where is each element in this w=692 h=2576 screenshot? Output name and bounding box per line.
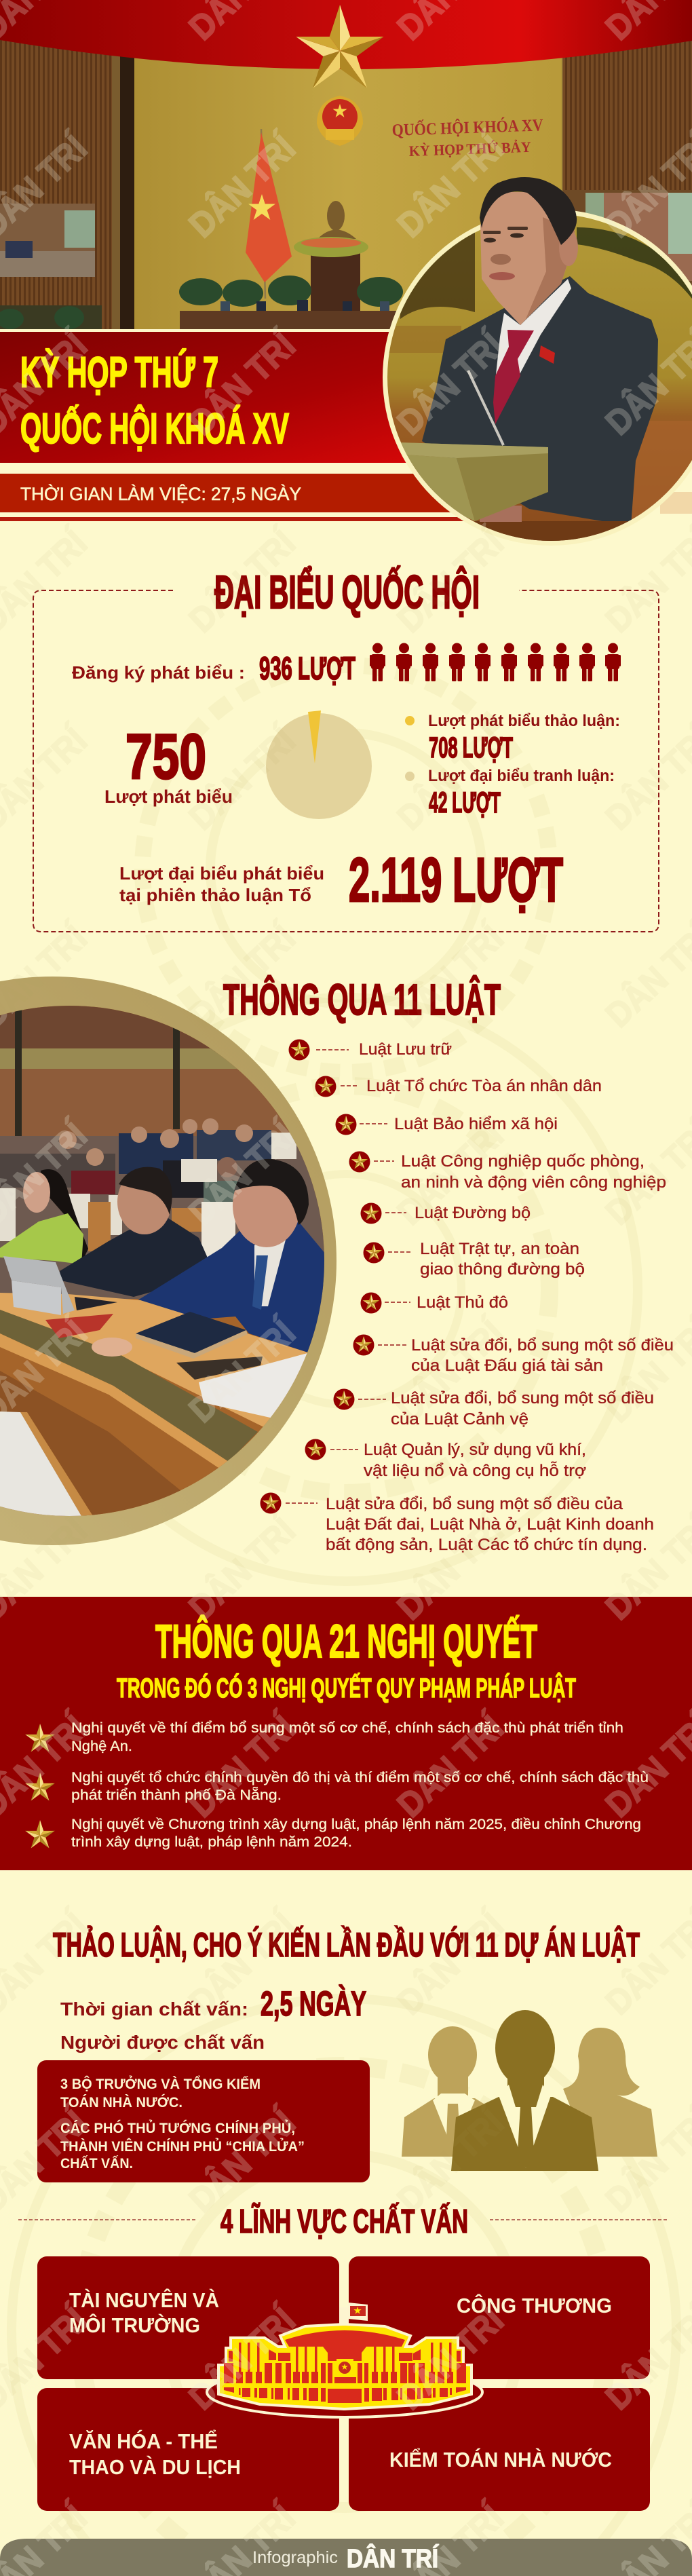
card: industry and trade	[349, 2256, 650, 2379]
man in navy suit	[138, 1221, 326, 1353]
nose and mouth	[491, 254, 511, 265]
law 5	[361, 1202, 531, 1224]
notebook	[136, 1312, 246, 1353]
resolution 3: trình xây dựng luật, pháp lệnh năm 2024.	[71, 1834, 352, 1850]
stat: 750 speeches: 750	[126, 721, 206, 792]
law 11	[261, 1493, 654, 1554]
resolution 2: Nghị quyết tổ chức chính quyền đô thị và thí điểm một số cơ chế, chính sách đặc thù	[71, 1770, 649, 1785]
phone	[176, 1357, 263, 1380]
red folder	[45, 1314, 113, 1338]
law 9: Luật sửa đổi, bổ sung một số điều	[391, 1389, 654, 1407]
law 10: vật liệu nổ và công cụ hỗ trợ	[364, 1462, 586, 1480]
right figure	[563, 2028, 657, 2157]
ear	[559, 229, 578, 266]
resolution 1: Nghị quyết về thí điểm bổ sung một số cơ chế, chính sách đặc thù phát triển tỉnh	[71, 1720, 623, 1736]
seats	[0, 1188, 16, 1241]
lectern	[400, 442, 548, 521]
card: natural resources: MÔI TRƯỜNG	[69, 2313, 200, 2337]
section title: Đại biểu Quốc hội: ĐẠI BIỂU QUỐC HỘI	[214, 566, 480, 618]
header: assembly hall photo	[0, 0, 692, 330]
law 6: giao thông đường bộ	[420, 1260, 585, 1278]
man in dark suit	[60, 1215, 209, 1297]
dashed panel frame	[33, 590, 659, 932]
law 6: Luật Trật tự, an toàn	[420, 1240, 579, 1258]
law 1: Luật Lưu trữ	[359, 1040, 452, 1059]
person icons	[370, 643, 621, 681]
pie chart	[266, 711, 372, 819]
desk surface	[0, 1293, 310, 1428]
flag	[261, 129, 265, 299]
laptop	[3, 1256, 75, 1314]
section title: Thông qua 11 luật: THÔNG QUA 11 LUẬT	[223, 974, 501, 1024]
audience rows	[0, 1136, 332, 1299]
law 8: Luật sửa đổi, bổ sung một số điều	[411, 1336, 674, 1355]
title band	[0, 329, 475, 463]
registered speakers row: 936 LƯỢT	[259, 650, 355, 686]
panel: people questioned	[37, 2060, 370, 2182]
hall wall	[134, 34, 562, 330]
card: natural resources	[37, 2256, 339, 2379]
law 8	[353, 1334, 674, 1375]
hall wall	[0, 1006, 216, 1052]
law 8: của Luật Đấu giá tài sản	[411, 1357, 603, 1375]
law 2: Luật Tổ chức Tòa án nhân dân	[366, 1077, 602, 1095]
law 10: Luật Quản lý, sử dụng vũ khí,	[364, 1441, 586, 1459]
blurred plant shapes	[400, 224, 475, 319]
legend: 42 LƯỢT	[429, 787, 501, 819]
stat: group discussion: Lượt đại biểu phát biểu	[119, 863, 324, 884]
foreground white panel	[20, 1412, 93, 1516]
documents	[199, 1353, 307, 1419]
panel: 21 resolutions	[0, 1597, 692, 1870]
legend	[405, 712, 620, 819]
questioning time: Thời gian chất vấn:	[60, 1999, 248, 2020]
tie	[493, 330, 534, 424]
podium and bust	[311, 252, 360, 330]
resolution 1: Nghệ An.	[71, 1739, 132, 1754]
shirt	[495, 279, 571, 381]
resolution 2	[25, 1770, 649, 1803]
card: culture	[37, 2388, 339, 2511]
panel: people questioned: CÁC PHÓ THỦ TƯỚNG CHÍNH PHỦ,	[60, 2120, 295, 2136]
law 7: Luật Thủ đô	[417, 1293, 508, 1312]
registered speakers row: Đăng ký phát biểu :	[72, 662, 245, 683]
law 4: Luật Công nghiệp quốc phòng,	[401, 1152, 645, 1171]
lower desk wood	[0, 1371, 180, 1516]
wall lettering: QUỐC HỘI KHÓA XV	[391, 115, 543, 140]
panel: people questioned: 3 BỘ TRƯỞNG VÀ TỔNG KIỂM	[60, 2076, 261, 2092]
law list	[261, 1040, 674, 1554]
card: industry and trade: CÔNG THƯƠNG	[457, 2293, 612, 2317]
card: state audit: KIỂM TOÁN NHÀ NƯỚC	[389, 2447, 612, 2471]
woman in green	[41, 1169, 88, 1264]
panel: people questioned: CHẤT VẤN.	[60, 2156, 133, 2172]
footer: Infographic	[252, 2548, 338, 2567]
law 9: của Luật Cảnh vệ	[391, 1410, 528, 1428]
side desks	[88, 1202, 111, 1251]
law 3: Luật Bảo hiểm xã hội	[394, 1115, 558, 1133]
law 6	[364, 1240, 585, 1278]
speaker suit	[422, 276, 658, 526]
card: culture: VĂN HÓA - THỂ	[69, 2429, 218, 2453]
resolution 1	[25, 1720, 623, 1754]
neck and face	[480, 192, 575, 325]
card: culture: THAO VÀ DU LỊCH	[69, 2455, 241, 2479]
questioning time: 2,5 NGÀY	[261, 1984, 366, 2023]
centre figure	[495, 2010, 555, 2086]
national emblem	[317, 96, 363, 146]
law 3	[335, 1114, 558, 1135]
top red banner	[0, 0, 692, 69]
law 2	[315, 1076, 602, 1097]
desk base	[475, 521, 628, 541]
law 9	[334, 1388, 654, 1428]
law 4: an ninh và động viên công nghiệp	[401, 1173, 666, 1192]
stat: group discussion	[119, 846, 563, 915]
card: natural resources: TÀI NGUYÊN VÀ	[69, 2288, 219, 2312]
legend: Lượt đại biểu tranh luận:	[428, 767, 615, 785]
law 1	[289, 1040, 452, 1060]
stat: group discussion: tại phiên thảo luận Tổ	[119, 885, 311, 905]
legend: 708 LƯỢT	[429, 732, 513, 764]
panel: people questioned: THÀNH VIÊN CHÍNH PHỦ “CHIA LỬA”	[60, 2138, 305, 2155]
stat: group discussion: 2.119 LƯỢT	[349, 846, 563, 915]
questioning time: Người được chất vấn	[60, 2032, 265, 2053]
law 10	[305, 1439, 586, 1480]
footer	[0, 2539, 692, 2576]
title band: QUỐC HỘI KHOÁ XV	[20, 404, 289, 453]
portrait circle	[380, 177, 692, 550]
background drum pattern	[12, 665, 676, 2576]
icon: National Assembly building	[207, 2303, 482, 2417]
law 11: Luật sửa đổi, bổ sung một số điều của	[326, 1495, 623, 1513]
law 11: bất động sản, Luật Các tổ chức tín dụng.	[326, 1536, 647, 1554]
hair	[480, 177, 577, 245]
lapel pin	[539, 345, 555, 364]
left figure	[428, 2026, 477, 2083]
microphone	[468, 371, 503, 445]
registered speakers row	[72, 643, 621, 686]
header: assembly hall photo: KỲ HỌP THỨ BẢY	[408, 138, 531, 159]
questioning time	[60, 1984, 366, 2053]
section title: 4 areas: 4 LĨNH VỰC CHẤT VẤN	[220, 2203, 468, 2240]
plants	[179, 278, 223, 305]
resolution 2: phát triển thành phố Đà Nẵng.	[71, 1787, 282, 1803]
resolution 3: Nghị quyết về Chương trình xây dựng luật, pháp lệnh năm 2025, điều chỉnh Chương	[71, 1817, 641, 1832]
law 4	[349, 1151, 666, 1192]
title text: KỲ HỌP THỨ 7	[20, 349, 218, 396]
legend: Lượt phát biểu thảo luận:	[428, 712, 620, 730]
card: state audit	[349, 2388, 650, 2511]
control strip	[0, 1310, 258, 1462]
icon: gold star	[296, 5, 384, 88]
resolution 3	[25, 1817, 641, 1850]
subtitle band: working time: THỜI GIAN LÀM VIỆC: 27,5 NGÀY	[20, 483, 301, 504]
deputies photo circle	[0, 977, 337, 1545]
hand	[92, 1338, 132, 1357]
presidium desk	[180, 311, 397, 330]
eyes and brows	[483, 231, 501, 234]
stat: 750 speeches: Lượt phát biểu	[104, 787, 233, 807]
panel: people questioned: TOÁN NHÀ NƯỚC.	[60, 2094, 182, 2110]
stat: 750 speeches	[104, 721, 233, 807]
footer: DÂN TRÍ	[347, 2543, 439, 2573]
subtitle band: working time	[0, 474, 468, 521]
law 7	[361, 1292, 508, 1314]
law 11: Luật Đất đai, Luật Nhà ở, Luật Kinh doanh	[326, 1515, 654, 1534]
icon: silhouettes	[402, 2010, 657, 2171]
law 5: Luật Đường bộ	[415, 1204, 531, 1222]
